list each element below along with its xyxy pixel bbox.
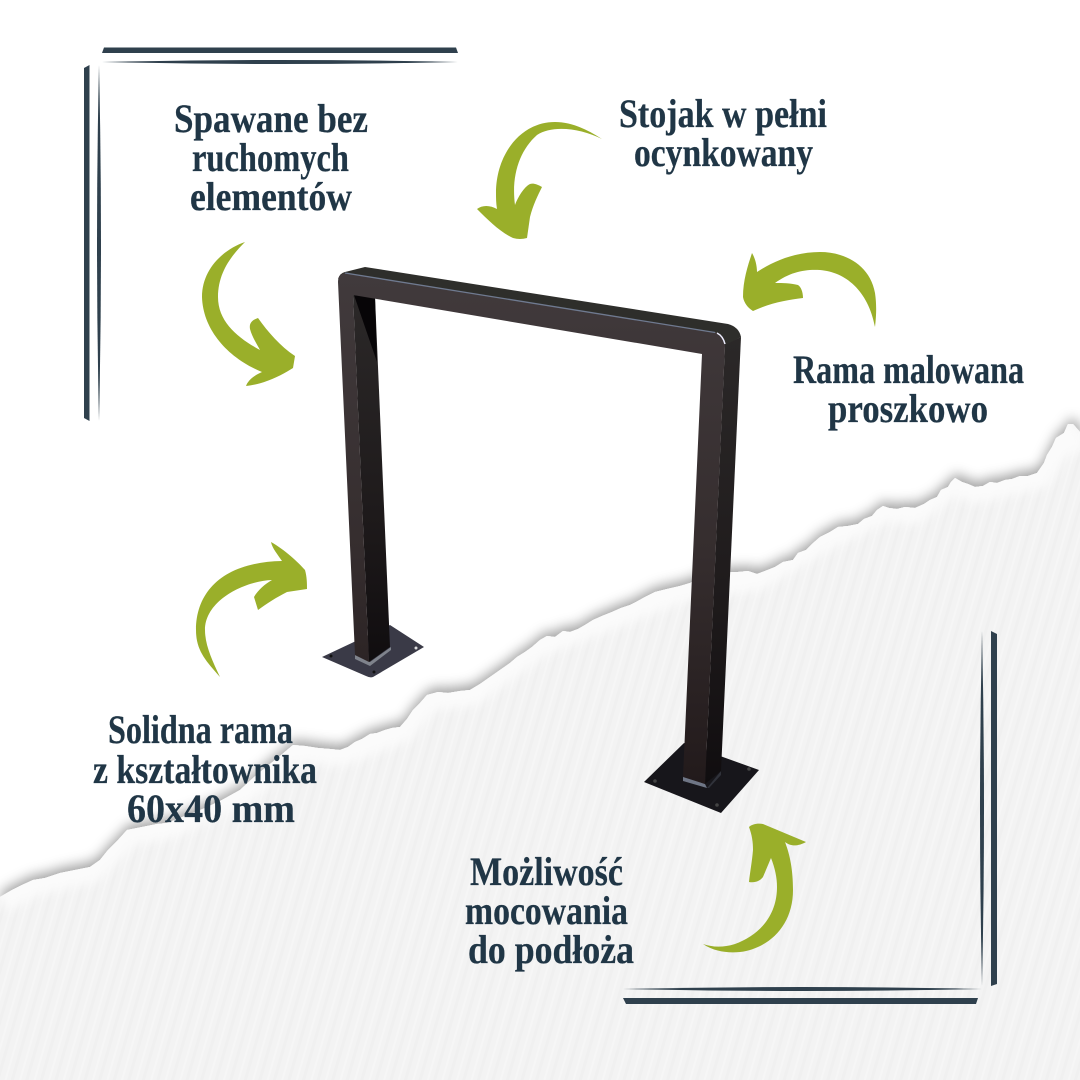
text: frame profile: 60x40 mm (127, 786, 295, 831)
arrow: galvanized callout (477, 122, 602, 239)
left post inner shadow (354, 295, 377, 362)
text: welded: ruchomych (192, 135, 349, 180)
left post side face (353, 295, 390, 662)
frame front face (338, 273, 725, 784)
text: frame profile: z kształtownika (93, 747, 317, 792)
text: mounting: do podłoża (468, 927, 634, 972)
arrow: powder coating callout (743, 252, 876, 327)
text: powder coating: Rama malowana (793, 347, 1024, 392)
arrow: frame profile callout (196, 542, 307, 677)
corner frame: bottom right (623, 631, 997, 1004)
bike stand (322, 267, 759, 813)
right base plate (644, 743, 759, 813)
text: welded (174, 96, 368, 219)
text: powder coating (793, 347, 1024, 431)
right post side face (705, 337, 741, 784)
text: mounting: Możliwość (470, 849, 623, 894)
left base plate (322, 625, 424, 677)
text: mounting: mocowania (465, 888, 628, 933)
text: galvanized (619, 91, 827, 175)
text: welded: elementów (190, 174, 352, 219)
text: frame profile (93, 707, 317, 831)
text: frame profile: Solidna rama (108, 707, 293, 752)
corner frame: top left (84, 48, 458, 421)
text: powder coating: proszkowo (828, 386, 988, 431)
frame top face (338, 267, 741, 346)
corner highlight (717, 333, 725, 344)
frame highlight (345, 273, 715, 332)
text: welded: Spawane bez (174, 96, 368, 141)
text: galvanized: ocynkowany (634, 130, 813, 175)
arrow: welded callout (202, 242, 295, 386)
torn paper background (0, 424, 1080, 1080)
text: galvanized: Stojak w pełni (619, 91, 827, 136)
arrow: mounting callout (703, 824, 806, 952)
text: mounting (465, 849, 634, 972)
